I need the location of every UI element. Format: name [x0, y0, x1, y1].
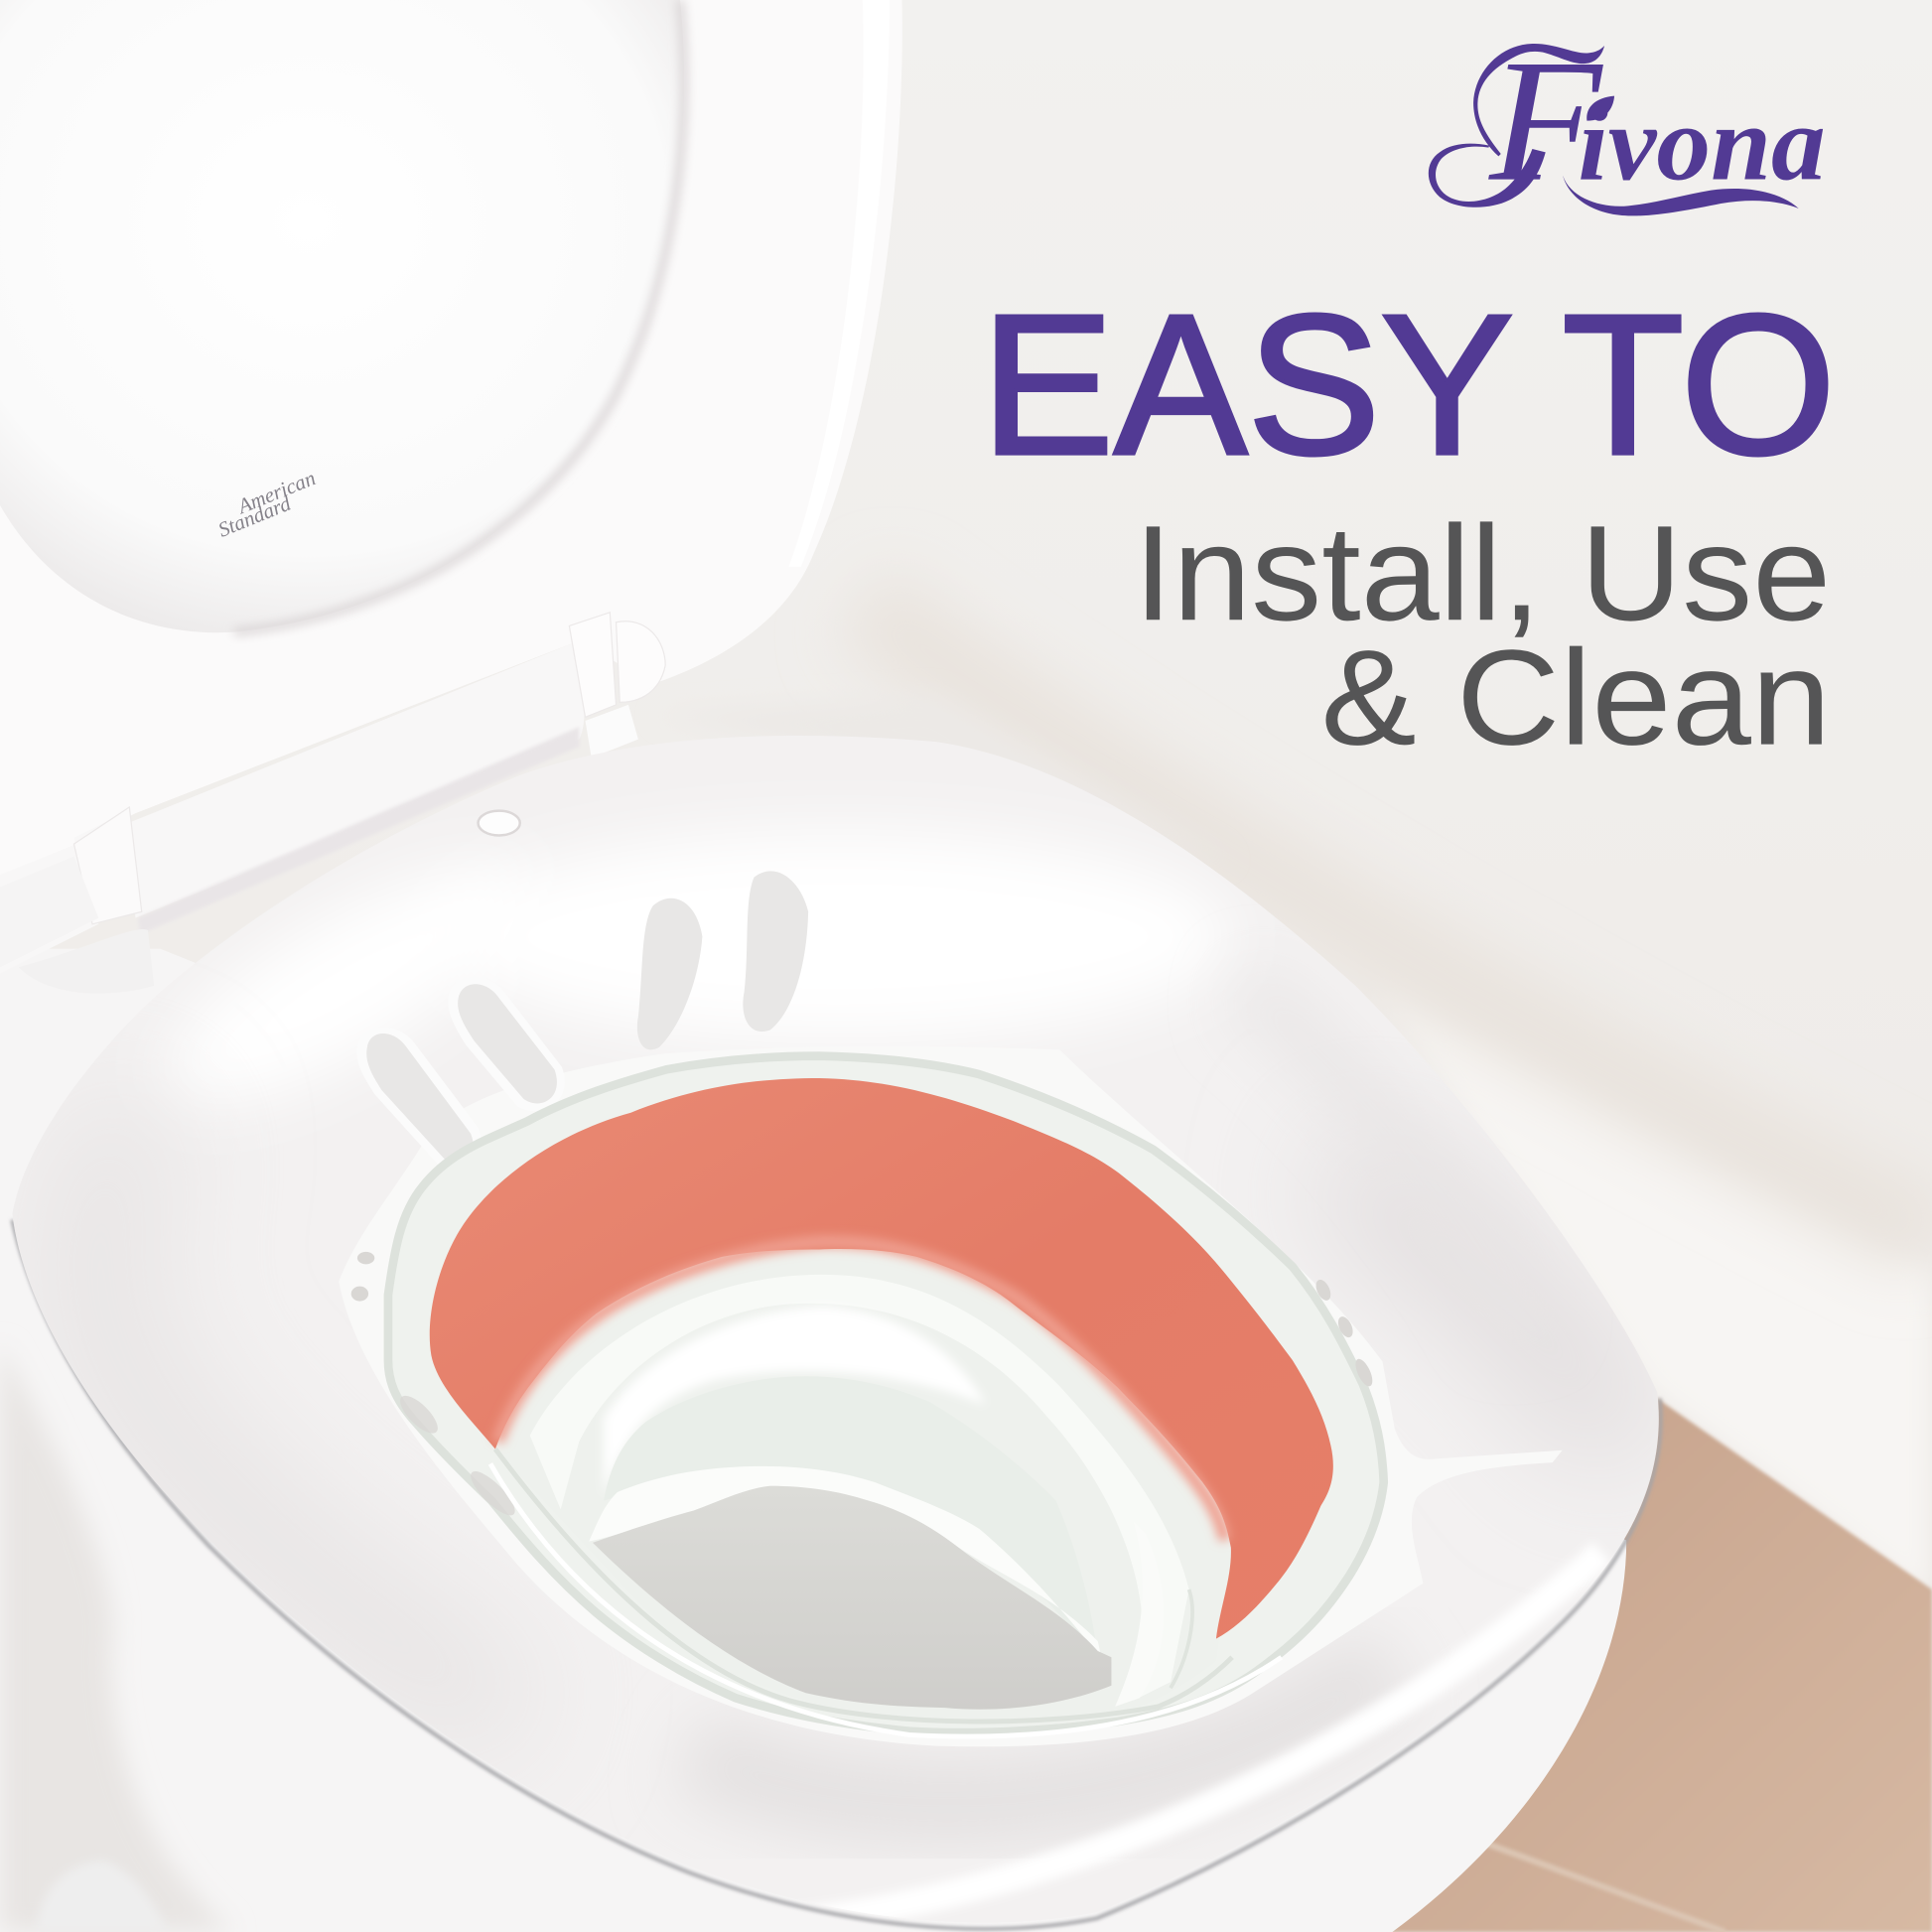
white highlight: [604, 1307, 986, 1497]
logo wordmark: F: F: [1488, 25, 1604, 218]
pink silicone band: [430, 1078, 1333, 1639]
drain hole: [479, 811, 520, 835]
lid inner panel: [0, 0, 684, 632]
heading: EASY TO: EASY TO: [981, 273, 1836, 496]
white stripe: [589, 1466, 1102, 1658]
rim shadow edge: [12, 1220, 1661, 1929]
logo bottom flourish: [1429, 144, 1546, 207]
basin flange: [339, 1046, 1563, 1746]
inner shell: [604, 1376, 1098, 1656]
floor tiles: [1380, 1399, 1932, 1932]
logo leaf: [1587, 96, 1614, 121]
rim highlight: [490, 1463, 1282, 1736]
lid brand mark: American: [232, 466, 319, 519]
baseboard: [1380, 986, 1932, 1601]
inner bowl: [495, 1249, 1232, 1725]
toilet lid: [0, 0, 902, 936]
subheading line two: & Clean: [1320, 621, 1831, 773]
basin outer ring: [388, 1056, 1384, 1732]
pink band highlight: [497, 1242, 1225, 1540]
right bowl ribs: [1115, 1522, 1164, 1707]
slots: [356, 871, 808, 1172]
logo: [1429, 25, 1826, 218]
seat hinge: [0, 613, 665, 994]
logo wordmark: ivona: ivona: [1578, 84, 1826, 204]
flange holes: [351, 1252, 1376, 1521]
toilet base: [0, 949, 1626, 1932]
logo top flourish: [1473, 44, 1604, 156]
bowl floor: [593, 1486, 1111, 1710]
subheading line one: Install, Use: [1134, 496, 1831, 648]
logo swoosh: [1563, 176, 1799, 215]
toilet lid: Standard: [214, 491, 295, 542]
sitz bath: [12, 736, 1661, 1929]
